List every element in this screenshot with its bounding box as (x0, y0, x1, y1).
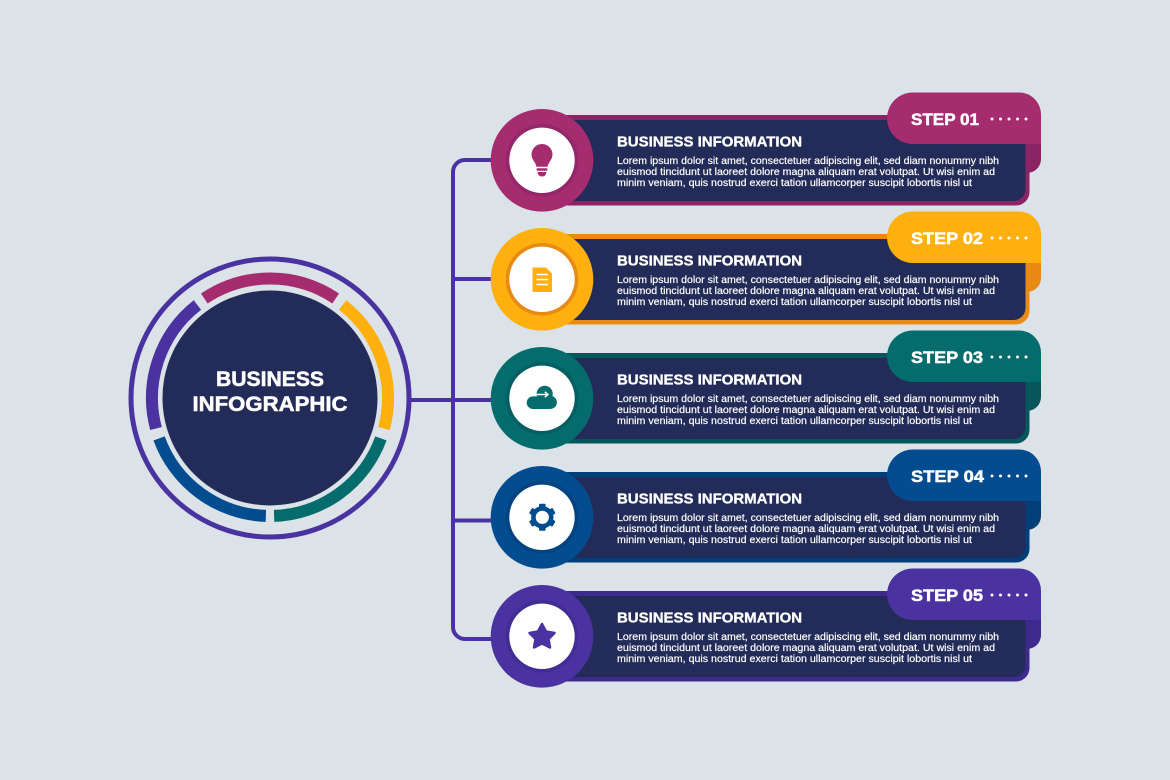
tab (887, 330, 1041, 382)
heading: BUSINESS INFORMATION (617, 134, 802, 150)
tab (887, 450, 1041, 501)
dots (990, 356, 1028, 358)
body text: Lorem ipsum dolor sit amet, consectetuer adipiscing elit, sed diam nonummy nibh (617, 632, 999, 643)
icon: star (530, 624, 554, 648)
bar body (560, 358, 1026, 439)
dots (990, 474, 1028, 478)
heading: BUSINESS INFORMATION (617, 492, 802, 508)
bar body (560, 239, 1026, 320)
tab shadow (1020, 249, 1041, 292)
step label: STEP 02 (911, 229, 983, 248)
tab shadow (1020, 368, 1041, 411)
connector lines (410, 160, 491, 639)
body text: Lorem ipsum dolor sit amet, consectetuer adipiscing elit, sed diam nonummy nibh (617, 275, 999, 286)
tab (887, 212, 1041, 263)
ring segment: magenta (204, 279, 336, 298)
bar body (560, 477, 1026, 558)
badge (491, 347, 593, 450)
step label: STEP 04 (911, 467, 985, 486)
bar body (560, 596, 1026, 677)
dots (990, 594, 1028, 596)
badge (491, 228, 593, 331)
body text: Lorem ipsum dolor sit amet, consectetuer adipiscing elit, sed diam nonummy nibh (617, 513, 999, 524)
step label: STEP 01 (911, 110, 979, 129)
ring segment: yellow (343, 305, 388, 428)
body text (617, 394, 999, 427)
body text: euismod tincidunt ut laoreet dolore magna aliquam erat volutpat. Ut wisi enim ad (617, 524, 995, 535)
badge (491, 466, 593, 569)
bar body (560, 120, 1026, 201)
panel: step 01 (491, 92, 1041, 212)
body text (617, 156, 999, 189)
outer ring (131, 259, 409, 537)
tab shadow (1020, 606, 1041, 649)
hub title (192, 368, 348, 416)
body text: euismod tincidunt ut laoreet dolore magna aliquam erat volutpat. Ut wisi enim ad (617, 643, 995, 654)
hub disc (162, 290, 378, 506)
icon: cloud (527, 386, 557, 409)
body text: euismod tincidunt ut laoreet dolore magna aliquam erat volutpat. Ut wisi enim ad (617, 405, 995, 416)
heading: BUSINESS INFORMATION (617, 610, 802, 626)
body text: minim veniam, quis nostrud exerci tation ullamcorper suscipit lobortis nisl ut (617, 535, 972, 546)
body text: Lorem ipsum dolor sit amet, consectetuer adipiscing elit, sed diam nonummy nibh (617, 156, 999, 167)
bar backing (560, 234, 1030, 324)
body text: minim veniam, quis nostrud exerci tation ullamcorper suscipit lobortis nisl ut (617, 297, 972, 308)
step label: STEP 03 (911, 348, 983, 367)
bar backing (560, 353, 1030, 444)
body text (617, 513, 999, 546)
tab shadow (1020, 130, 1041, 173)
tab (887, 92, 1041, 144)
badge (491, 109, 593, 212)
bar backing (560, 472, 1030, 562)
body text: euismod tincidunt ut laoreet dolore magna aliquam erat volutpat. Ut wisi enim ad (617, 286, 995, 297)
tab shadow (1020, 487, 1041, 530)
icon: document (532, 268, 552, 292)
body text: Lorem ipsum dolor sit amet, consectetuer adipiscing elit, sed diam nonummy nibh (617, 394, 999, 405)
icon: light bulb (532, 144, 552, 176)
bar backing (560, 115, 1030, 206)
dots (990, 236, 1028, 240)
body text (617, 632, 999, 665)
central hub (131, 259, 409, 537)
hub title: BUSINESS (216, 368, 324, 391)
icon: gear (529, 504, 556, 531)
body text (617, 275, 999, 308)
badge (491, 585, 593, 688)
panel: step 04 (491, 450, 1041, 569)
bar backing (560, 591, 1030, 682)
dots (990, 118, 1028, 120)
ring segment: purple (152, 305, 197, 428)
tab (887, 568, 1041, 620)
body text: euismod tincidunt ut laoreet dolore magna aliquam erat volutpat. Ut wisi enim ad (617, 167, 995, 178)
heading: BUSINESS INFORMATION (617, 254, 802, 270)
body text: minim veniam, quis nostrud exerci tation ullamcorper suscipit lobortis nisl ut (617, 416, 972, 427)
panel: step 03 (491, 330, 1041, 450)
ring segment: blue (159, 438, 266, 516)
heading: BUSINESS INFORMATION (617, 372, 802, 388)
step label: STEP 05 (911, 586, 983, 605)
panel: step 05 (491, 568, 1041, 688)
body text: minim veniam, quis nostrud exerci tation ullamcorper suscipit lobortis nisl ut (617, 178, 972, 189)
body text: minim veniam, quis nostrud exerci tation ullamcorper suscipit lobortis nisl ut (617, 654, 972, 665)
ring segment: teal (274, 438, 381, 516)
hub title: INFOGRAPHIC (192, 393, 348, 416)
panel: step 02 (491, 212, 1041, 331)
